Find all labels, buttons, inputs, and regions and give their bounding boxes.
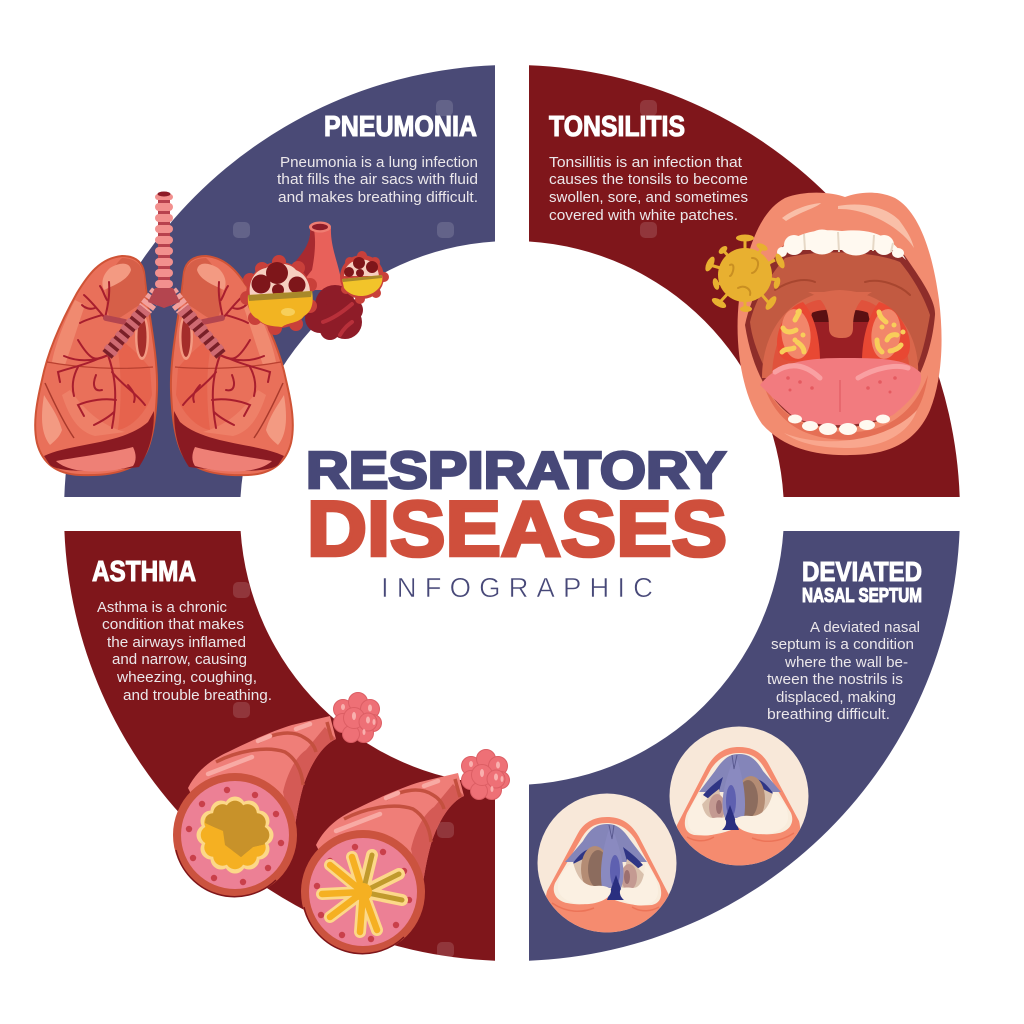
text: deviated septum description: septum is a condition [771,637,914,653]
heading: deviated nasal septum: NASAL SEPTUM [802,585,922,607]
heading: deviated nasal septum [802,556,922,607]
text: pneumonia description: and makes breathing difficult. [278,190,478,206]
icon: nose with deviated septum, back [670,726,808,878]
icon: bronchus, constricted airway [301,750,510,954]
text: deviated septum description [767,620,920,723]
text: tonsilitis description: covered with white patches. [549,208,738,224]
title: RESPIRATORY [306,442,726,500]
title: INFOGRAPHIC [381,572,653,603]
text: tonsilitis description: swollen, sore, and sometimes [549,190,748,206]
title [306,442,727,603]
title: DISEASES [307,484,727,572]
text: tonsilitis description [549,155,748,224]
text: asthma description: and narrow, causing [112,652,247,668]
text: pneumonia description [277,155,478,206]
text: asthma description: and trouble breathing. [123,688,272,704]
icon: nose with deviated septum, front [538,794,676,932]
text: deviated septum description: A deviated nasal [810,620,920,636]
panel: tonsilitis quadrant [529,65,960,497]
text: deviated septum description: displaced, making [776,690,896,706]
heading: asthma: ASTHMA [92,556,196,588]
panel: pneumonia quadrant [64,65,495,497]
text: pneumonia description: that fills the air sacs with fluid [277,172,478,188]
text: asthma description: the airways inflamed [107,635,246,651]
text: deviated septum description: where the wall be- [784,655,908,671]
heading: tonsilitis: TONSILITIS [549,111,685,143]
text: deviated septum description: breathing difficult. [767,707,890,723]
icon: open mouth with infected tonsils [738,193,942,455]
text: asthma description: wheezing, coughing, [116,670,257,686]
text: asthma description: condition that makes [102,617,244,633]
panel: deviated septum quadrant [529,531,960,961]
heading: pneumonia: PNEUMONIA [324,111,477,143]
icon: alveoli [240,222,389,340]
text: tonsilitis description: Tonsillitis is an infection that [549,155,742,171]
text: asthma description [97,600,272,704]
heading: deviated nasal septum: DEVIATED [802,556,922,587]
text: tonsilitis description: causes the tonsils to become [549,172,748,188]
icon: bronchus, asthmatic with mucus [173,692,382,897]
icon: virus [703,234,787,312]
text: asthma description: Asthma is a chronic [97,600,227,616]
text: pneumonia description: Pneumonia is a lung infection [280,155,478,171]
watermark icons [233,100,657,958]
icon: lungs [35,192,293,475]
text: deviated septum description: tween the nostrils is [767,672,903,688]
panel: asthma quadrant [64,531,495,961]
